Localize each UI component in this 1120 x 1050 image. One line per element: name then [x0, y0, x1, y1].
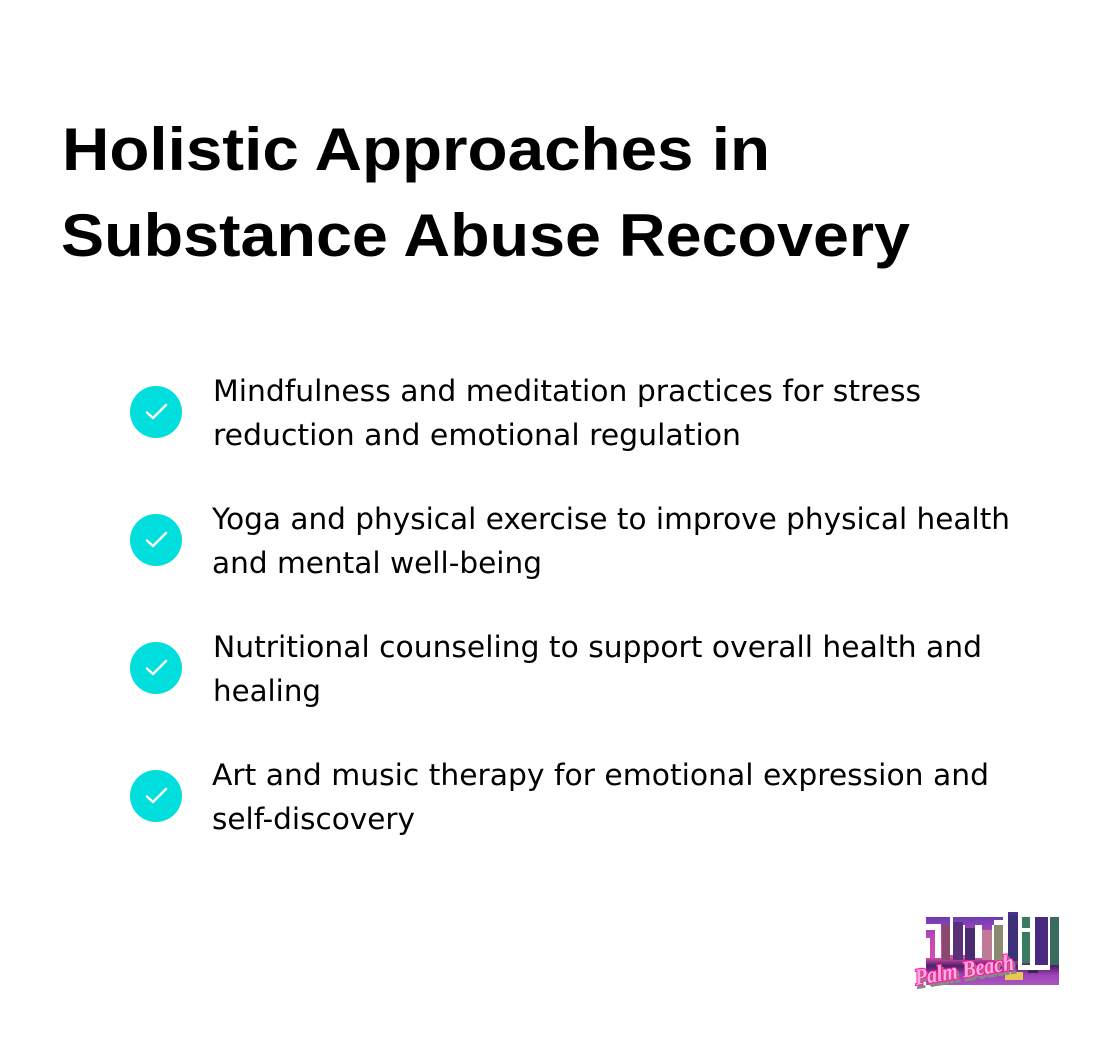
text: item 4: Art and music therapy for emotional expression and — [212, 758, 989, 792]
title — [61, 116, 911, 269]
text: item 3: Nutritional counseling to support overall health and — [213, 630, 982, 664]
logo script text: Palm Beach — [914, 953, 1018, 993]
text: item 1: reduction and emotional regulation — [213, 418, 741, 452]
text: item 2: and mental well-being — [212, 546, 542, 580]
text: item 1: Mindfulness and meditation practices for stress — [213, 374, 921, 408]
icon: check 2 — [130, 514, 182, 566]
text: item 2 — [211, 502, 1010, 580]
text: item 3 — [213, 630, 982, 708]
list item 1 — [130, 374, 921, 452]
text: item 3: healing — [213, 674, 321, 708]
icon: check 3 — [130, 642, 182, 694]
icon: check 4 — [130, 770, 182, 822]
title: Holistic Approaches in — [62, 116, 770, 183]
title: Substance Abuse Recovery — [61, 202, 911, 269]
icon: check 1 — [130, 386, 182, 438]
text: item 4: self-discovery — [212, 802, 415, 836]
text: item 4 — [212, 758, 989, 836]
logo: Amitay Palm Beach — [912, 912, 1059, 993]
list item 2 — [130, 502, 1010, 580]
list item 3 — [130, 630, 982, 708]
text: item 2: Yoga and physical exercise to improve physical health — [211, 502, 1010, 536]
list item 4 — [130, 758, 989, 836]
text: item 1 — [213, 374, 921, 452]
logo script text: Palm Beach — [912, 950, 1016, 990]
logo white letter cuts — [926, 912, 1050, 970]
